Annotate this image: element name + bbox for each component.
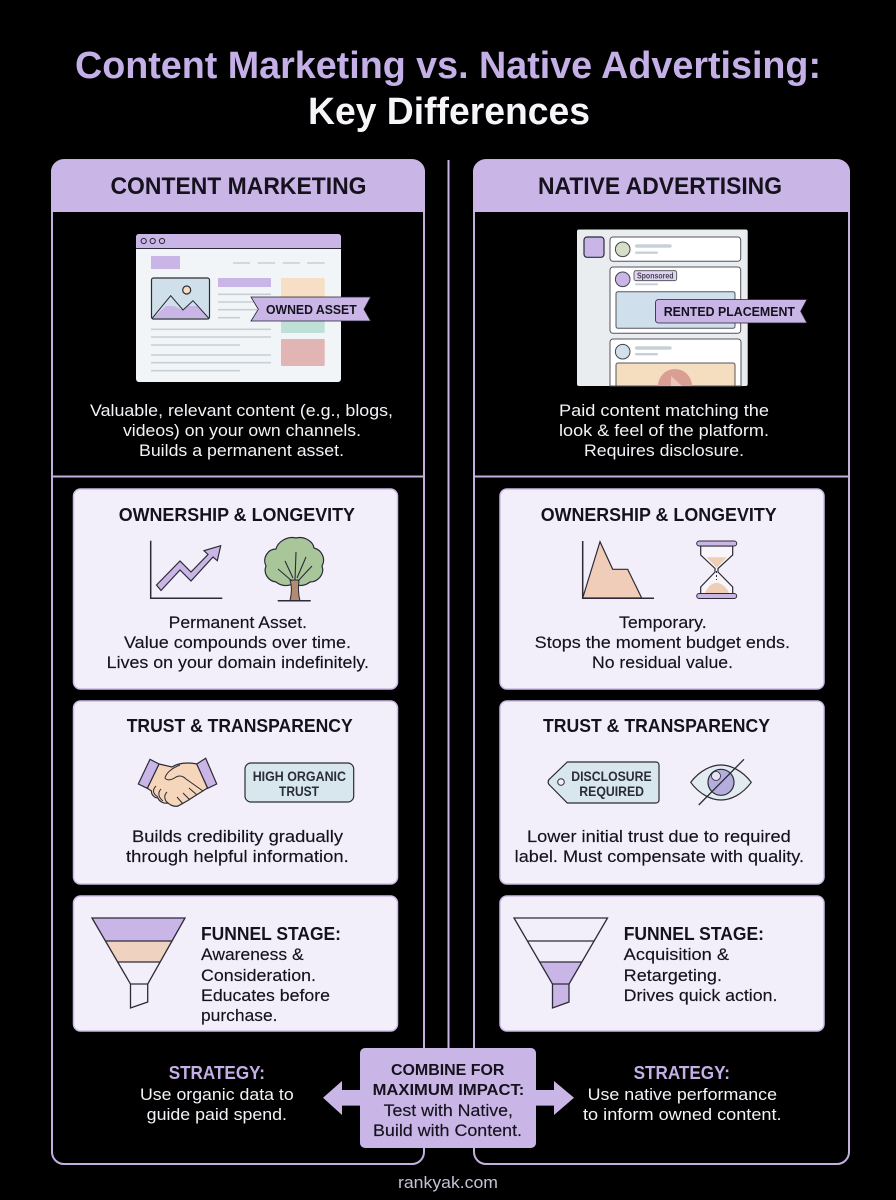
- illustration: social feed: [577, 230, 807, 386]
- ribbon: owned asset: [251, 297, 371, 321]
- native advertising description: Requires disclosure.: [584, 441, 744, 460]
- icon: disclosure tag: REQUIRED: [579, 784, 644, 799]
- content marketing header: [51, 160, 425, 212]
- card: ownership and longevity (content): Lives on your domain indefinitely.: [107, 653, 369, 672]
- title: Key Differences: [308, 91, 590, 133]
- ribbon: owned asset: OWNED ASSET: [266, 302, 357, 317]
- panel: content marketing: [51, 160, 425, 1164]
- strategy text (native): Use native performance: [588, 1085, 777, 1104]
- card: ownership and longevity (content): Permanent Asset.: [169, 613, 307, 632]
- card: ownership and longevity (content): Value compounds over time.: [124, 633, 351, 652]
- callout: combine for maximum impact: Test with Native,: [384, 1101, 513, 1120]
- badge: high organic trust: HIGH ORGANIC: [253, 769, 346, 784]
- funnel text: [624, 924, 777, 1005]
- panel: native advertising: [473, 160, 850, 1164]
- card: funnel stage (native): [500, 896, 824, 1031]
- native advertising description: Paid content matching the: [559, 401, 769, 420]
- title: [75, 45, 821, 133]
- strategy text (content): Use organic data to: [140, 1085, 294, 1104]
- icon: funnel bottom stage highlighted: [514, 918, 608, 1008]
- card: trust and transparency (native): [500, 701, 824, 884]
- card: ownership and longevity (native): No residual value.: [592, 653, 733, 672]
- strategy text (content): [140, 1063, 294, 1124]
- card: ownership and longevity (native): Temporary.: [619, 613, 707, 632]
- card: ownership and longevity (content): [74, 489, 398, 689]
- card: trust and transparency (content): Builds credibility gradually: [132, 827, 344, 846]
- card: trust and transparency (content): TRUST & TRANSPARENCY: [127, 716, 353, 736]
- icon: spike and drop chart: [583, 541, 654, 598]
- strategy text (native): [583, 1063, 782, 1124]
- ribbon: rented placement: RENTED PLACEMENT: [664, 304, 795, 319]
- ribbon: rented placement: [656, 300, 807, 323]
- callout: combine for maximum impact: MAXIMUM IMPACT:: [373, 1082, 524, 1099]
- native advertising header: [473, 160, 850, 212]
- funnel text: purchase.: [201, 1006, 278, 1025]
- strategy text (content): STRATEGY:: [169, 1063, 265, 1083]
- title: Content Marketing vs. Native Advertising:: [75, 45, 821, 87]
- arrow: right: [536, 1081, 574, 1115]
- card: trust and transparency (content): [74, 701, 398, 884]
- icon: growth chart: [151, 541, 222, 598]
- card: trust and transparency (native): Lower initial trust due to required: [527, 827, 791, 846]
- callout: combine for maximum impact: Build with Content.: [373, 1121, 522, 1140]
- card: ownership and longevity (native): OWNERSHIP & LONGEVITY: [541, 505, 777, 525]
- strategy text (content): guide paid spend.: [147, 1105, 287, 1124]
- funnel text: FUNNEL STAGE:: [624, 924, 764, 944]
- card: trust and transparency (native): TRUST & TRANSPARENCY: [543, 716, 770, 736]
- funnel text: Awareness &: [201, 945, 304, 964]
- funnel text: Consideration.: [201, 966, 316, 985]
- card: trust and transparency (content): through helpful information.: [126, 847, 349, 866]
- illustration: owned blog page: [136, 234, 371, 382]
- icon: disclosure tag: [548, 762, 659, 803]
- badge: high organic trust: [245, 763, 354, 802]
- arrow: left: [323, 1081, 360, 1115]
- content marketing description: [90, 401, 393, 460]
- icon: crossed eye: [691, 759, 751, 805]
- card: trust and transparency (native): label. Must compensate with quality.: [515, 847, 804, 866]
- content marketing description: Builds a permanent asset.: [139, 441, 344, 460]
- badge: high organic trust: TRUST: [279, 784, 320, 799]
- content marketing header: CONTENT MARKETING: [110, 173, 366, 200]
- card: ownership and longevity (content): OWNERSHIP & LONGEVITY: [119, 505, 355, 525]
- icon: funnel top stages highlighted: [92, 918, 185, 1008]
- content marketing description: Valuable, relevant content (e.g., blogs,: [90, 401, 393, 420]
- card: ownership and longevity (native): Stops the moment budget ends.: [535, 633, 790, 652]
- icon: hourglass: [697, 541, 737, 598]
- content marketing description: videos) on your own channels.: [123, 421, 361, 440]
- callout: combine for maximum impact: [323, 1048, 574, 1148]
- funnel text: Retargeting.: [624, 966, 722, 985]
- funnel text: Educates before: [201, 986, 330, 1005]
- icon: disclosure tag: DISCLOSURE: [571, 769, 652, 784]
- card: funnel stage (content): [74, 896, 398, 1031]
- funnel text: FUNNEL STAGE:: [201, 924, 341, 944]
- card: ownership and longevity (native): [500, 489, 824, 689]
- funnel text: Drives quick action.: [624, 986, 777, 1005]
- callout: combine for maximum impact: COMBINE FOR: [391, 1062, 505, 1079]
- funnel text: [201, 924, 341, 1025]
- native advertising description: look & feel of the platform.: [559, 421, 769, 440]
- native advertising description: [559, 401, 769, 460]
- sponsored tag: Sponsored: [637, 272, 674, 281]
- strategy text (native): STRATEGY:: [634, 1063, 730, 1083]
- funnel text: Acquisition &: [624, 945, 730, 964]
- footer source: rankyak.com: [398, 1173, 498, 1192]
- icon: handshake: [138, 758, 217, 806]
- native advertising header: NATIVE ADVERTISING: [538, 173, 782, 200]
- icon: tree: [265, 538, 324, 601]
- strategy text (native): to inform owned content.: [583, 1105, 782, 1124]
